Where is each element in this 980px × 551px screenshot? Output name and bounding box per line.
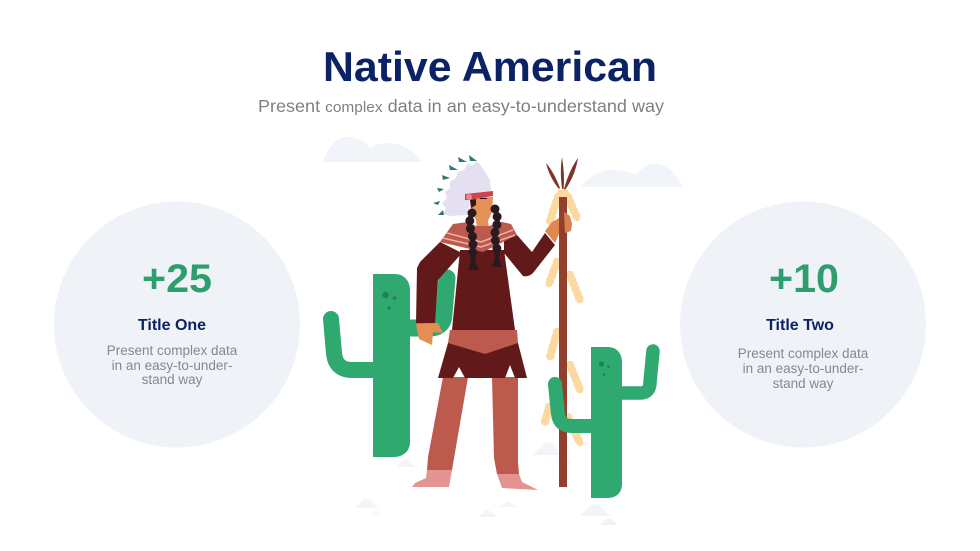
right fingers xyxy=(564,212,572,233)
icon: left cactus xyxy=(331,274,447,457)
text block: right description: stand way xyxy=(773,376,834,391)
panel: left stat circle xyxy=(54,202,300,448)
dress xyxy=(438,250,527,378)
right leg xyxy=(492,377,519,474)
icon: spear with corn xyxy=(545,157,580,443)
figure: native american person xyxy=(412,155,572,490)
text block: left description: Present complex data xyxy=(107,343,238,358)
stat: +25: +25 xyxy=(142,257,212,301)
text block: left description: stand way xyxy=(142,372,203,387)
sleeve: right arm xyxy=(504,233,555,276)
icon: left cloud xyxy=(322,137,423,162)
headband xyxy=(465,191,493,200)
icon: right cloud xyxy=(580,164,682,187)
left leg xyxy=(427,377,468,470)
text block: left description: in an easy-to-under- xyxy=(112,358,232,373)
hair and eyebrow xyxy=(470,199,476,208)
right foot xyxy=(497,474,538,490)
heading: Title One: Title One xyxy=(138,317,206,334)
yoke xyxy=(440,222,517,252)
panel: right stat circle xyxy=(680,202,926,448)
subtitle: Present complex data in an easy-to-understand way xyxy=(258,96,664,116)
feather tips xyxy=(433,155,477,215)
headdress xyxy=(442,161,491,216)
text block: right description: Present complex data xyxy=(738,346,869,361)
neck and face xyxy=(470,197,493,228)
text block: right description: in an easy-to-under- xyxy=(743,361,863,376)
left hand xyxy=(416,323,443,345)
spear shaft xyxy=(559,197,567,487)
stat: +10: +10 xyxy=(769,257,839,301)
sleeve: left arm xyxy=(416,242,462,323)
title: Native American xyxy=(323,43,657,90)
skirt band xyxy=(448,330,518,354)
right palm xyxy=(545,218,559,243)
left foot xyxy=(412,470,452,487)
braids xyxy=(470,209,497,262)
heading: Title Two: Title Two xyxy=(766,317,834,334)
ground mounds xyxy=(355,443,618,525)
icon: right cactus xyxy=(555,347,653,498)
